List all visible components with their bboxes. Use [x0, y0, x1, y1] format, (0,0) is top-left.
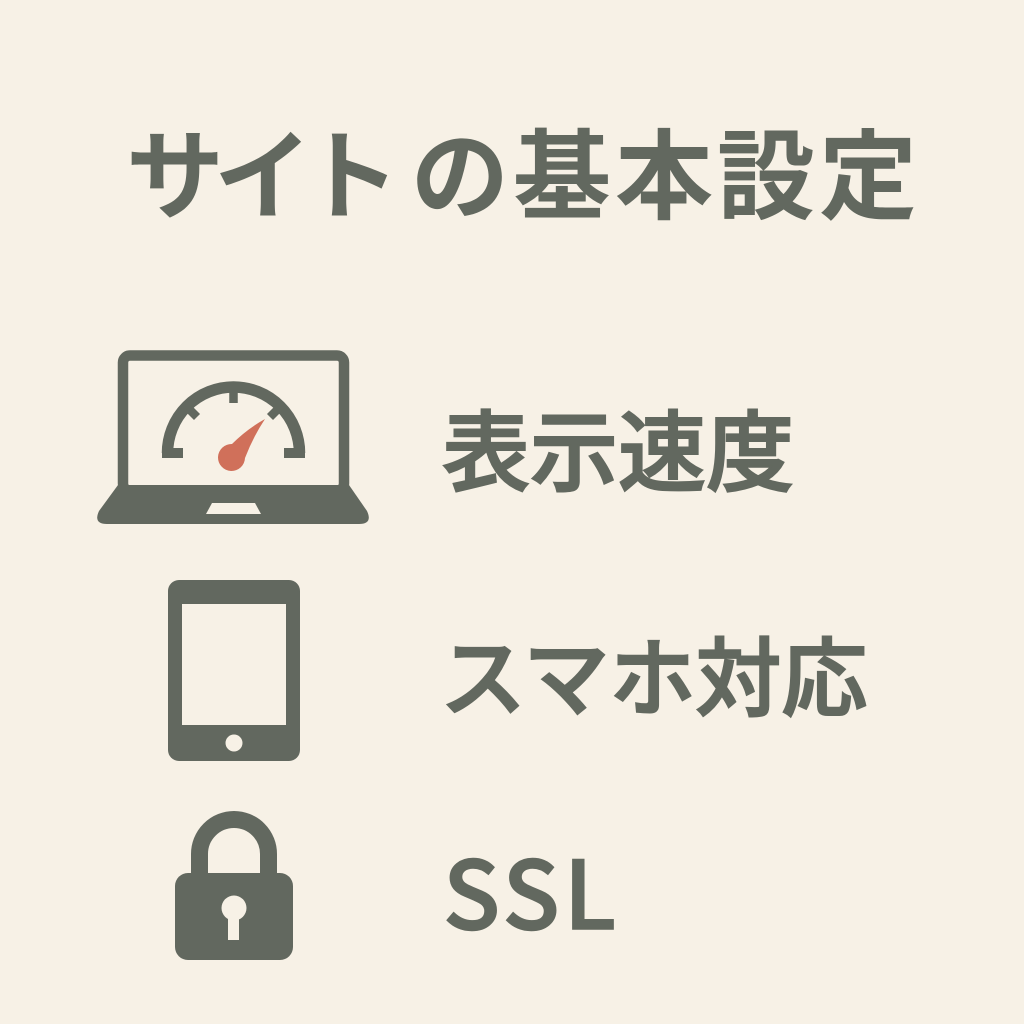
label: SSL: SSL — [443, 821, 620, 957]
title: サイト — [126, 98, 390, 240]
label: display speed: 表示速度 — [442, 383, 794, 510]
icon: laptop with speedometer — [97, 356, 369, 524]
title — [126, 98, 921, 240]
label: mobile support: スマホ対応 — [440, 609, 867, 734]
title: の基本設定 — [411, 98, 921, 240]
icon: tablet — [168, 580, 300, 761]
icon: padlock — [175, 820, 293, 960]
gauge needle — [218, 419, 265, 471]
